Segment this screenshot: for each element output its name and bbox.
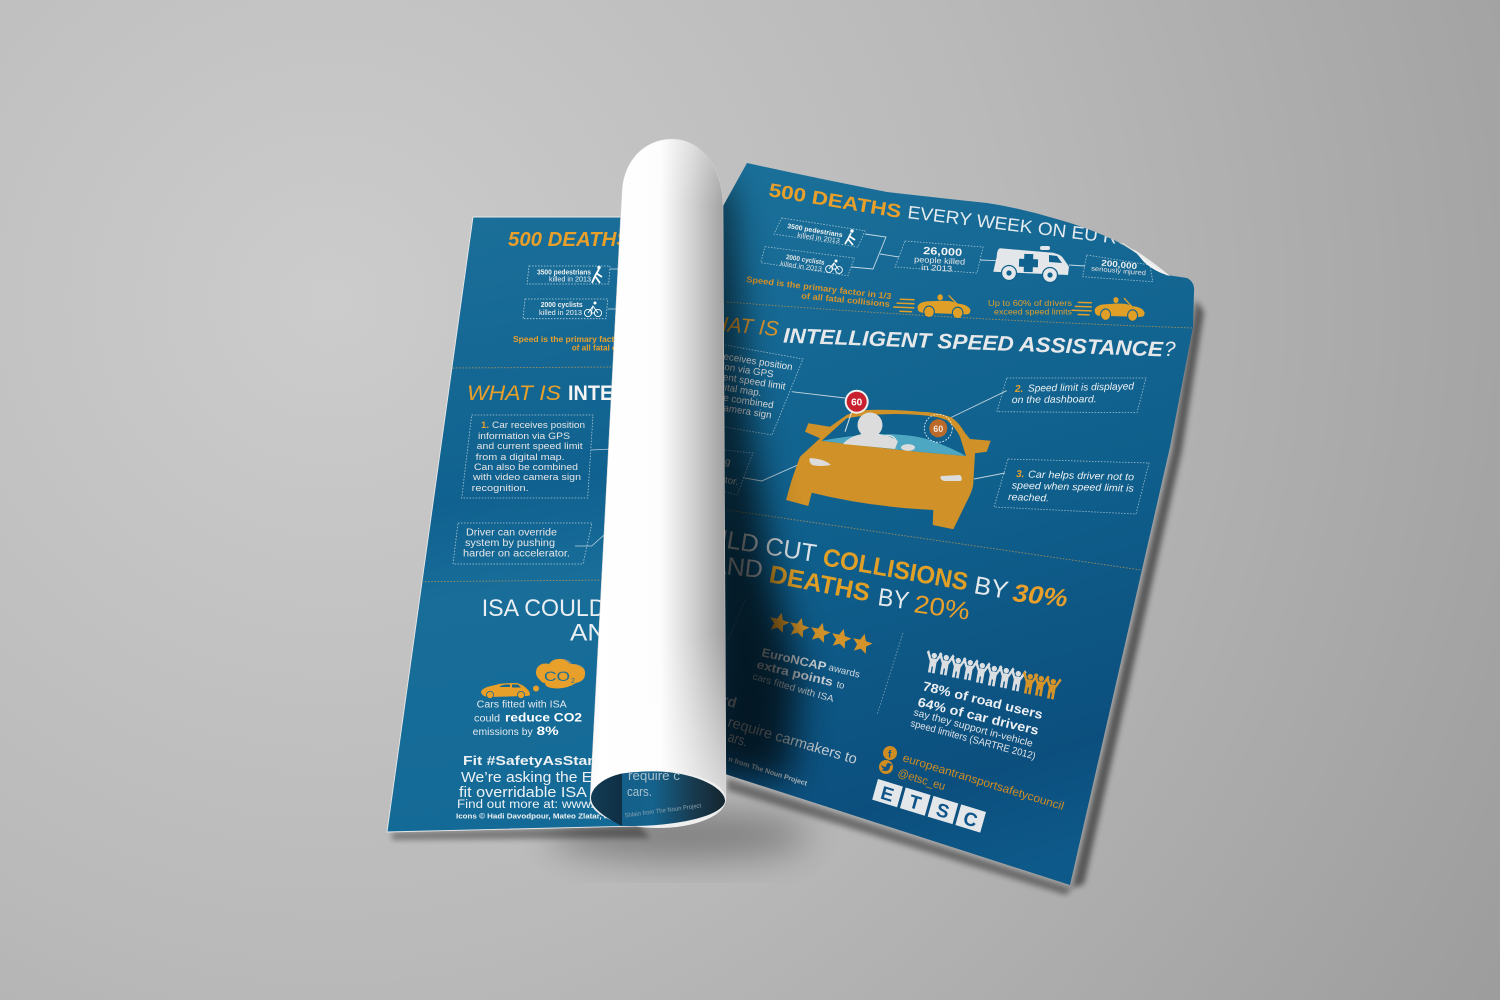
panel: left page of leaflet <box>386 216 638 832</box>
text: speed factor: Speed is the primary factor in 1/3 <box>746 274 892 301</box>
box: step 1: from a digital map. <box>476 452 565 463</box>
box: cyclists: killed in 2013 <box>780 261 823 273</box>
icon: dashboard speed display <box>924 414 952 442</box>
heading: ISA could cut collisions: 20% <box>912 590 972 626</box>
heading: what is intelligent speed assistance <box>724 317 1176 356</box>
text: call to action: Fit #SafetyAsStandard <box>463 753 631 768</box>
box: step 3: 3. <box>1016 469 1025 480</box>
box: step 1: with video camera sign <box>671 395 772 421</box>
box: cyclists: 2000 cyclists <box>785 254 825 267</box>
heading: what is intelligent <box>469 386 612 400</box>
box: 200,000 injured: seriously injured <box>1091 266 1146 277</box>
icon: car and CO2 cloud <box>481 659 585 699</box>
text: drivers exceed limits <box>988 300 1072 316</box>
box: step 1: 1. Car receives position <box>690 346 793 373</box>
box: step 3 <box>994 459 1149 514</box>
heading: ISA could cut: ISA COULD CUT <box>482 595 660 622</box>
text: call to action: Icons © Hadi Davodpour, Mateo Zlatar, Ivan Shlain <box>456 812 646 820</box>
text: reduce CO2: 8% <box>537 726 559 738</box>
icon: facebook: f <box>888 750 892 760</box>
icon: car and CO2 cloud: CO <box>544 668 570 684</box>
box: step 1: information via GPS <box>478 431 570 442</box>
heading: 500 deaths every week <box>769 183 1123 245</box>
roll lighting <box>590 139 726 800</box>
callout lines <box>743 391 1007 481</box>
heading: what is intelligent speed assistance: INTELLIGENT SPEED ASSISTANCE <box>783 325 1164 361</box>
box: pedestrians <box>774 218 865 247</box>
box: step 2 <box>997 378 1146 413</box>
text: speed primary factor <box>513 336 614 350</box>
icon: five stars <box>770 613 872 654</box>
text: speed factor <box>746 276 891 307</box>
box: cyclists <box>761 247 854 276</box>
text: noun project credit: n from The Noun Project <box>727 756 808 788</box>
text: EuroNCAP: to <box>835 679 846 692</box>
text: reduce CO2: emissions by <box>473 727 533 738</box>
shadow cast by roll <box>700 170 800 780</box>
box: pedestrians: 3500 pedestrians <box>537 270 591 276</box>
heading: what is intelligent speed assistance: ? <box>1164 338 1176 361</box>
box: step 1: Can also be combined <box>474 462 578 473</box>
icon: row of people <box>923 650 1062 700</box>
box: cyclists <box>523 299 620 319</box>
heading: ISA could cut collisions: 30% <box>1011 579 1069 613</box>
text: speed factor: of all fatal collisions <box>801 291 891 309</box>
box: cyclists: 2000 cyclists <box>541 302 583 309</box>
text: social handles: europeantransportsafetycouncil <box>901 752 1065 813</box>
heading: what is intelligent speed assistance: WHAT IS <box>692 311 780 341</box>
heading: ISA could cut collisions: COLLISIONS <box>821 543 970 596</box>
logo: ETSC <box>872 779 986 834</box>
text: require carmakers: Fit #SafetyAsStandard <box>586 653 738 712</box>
text: reduce CO2: Cars fitted with ISA <box>477 700 567 711</box>
box: step 1 <box>724 344 804 436</box>
text: reduce CO2 <box>473 700 582 738</box>
icon: roadside speed sign <box>845 390 869 432</box>
text: EuroNCAP <box>753 648 860 702</box>
box: pedestrians: killed in 2013 <box>549 277 591 284</box>
text: speed primary factor: of all fatal collisions <box>572 342 650 352</box>
box: step 1: information via GPS <box>686 356 775 381</box>
box: driver override: harder on accelerator. <box>463 549 570 560</box>
text: EuroNCAP: cars fitted with ISA <box>751 671 836 705</box>
box: step 2: on the dashboard. <box>1012 394 1097 406</box>
icon: speeding car 2 <box>1071 296 1145 322</box>
roll body <box>590 139 726 800</box>
heading: 500 deaths every week: 500 DEATHS <box>767 180 903 223</box>
box: step 1: 1. <box>481 420 489 431</box>
text: survey results: 64% of car drivers <box>916 694 1040 738</box>
box: step 2: 2. <box>1014 384 1023 395</box>
right page content <box>723 175 1192 833</box>
connector lines <box>851 234 1085 269</box>
box: step 3: Car helps driver not to <box>1028 470 1135 483</box>
text: social handles: @etsc_eu <box>896 767 946 793</box>
box: driver override <box>453 523 604 564</box>
icon: twitter <box>879 760 893 774</box>
box: pedestrians <box>527 266 622 284</box>
text: call to action: fit overridable ISA <box>459 785 587 801</box>
box: step 1: Can also be combined <box>676 385 774 411</box>
logo: ETSC: T <box>906 791 924 815</box>
text: EuroNCAP: extra points <box>755 657 835 689</box>
heading: what is intelligent: WHAT IS <box>467 382 561 405</box>
heading: ISA could cut collisions: AND <box>709 551 764 584</box>
text inside roll: Shlain from The Noun Project <box>624 802 702 819</box>
heading: 500 deaths: 500 DEATHS <box>508 229 631 251</box>
roll opening: inside right <box>622 771 725 826</box>
text: require carmakers: require carmakers to <box>726 714 859 768</box>
box: 200,000 injured <box>1083 255 1153 282</box>
left page content <box>422 232 620 820</box>
panel: right page of leaflet <box>723 163 1194 885</box>
box: step 1: recognition. <box>472 483 529 494</box>
heading: ISA could cut collisions: BY <box>876 583 911 615</box>
box: step 2: Speed limit is displayed <box>1028 381 1134 395</box>
icon: ambulance <box>993 246 1069 282</box>
heading: 500 deaths every week: EVERY WEEK ON EU ROADS <box>907 202 1172 254</box>
page curl at top right corner <box>1133 249 1170 276</box>
logo: ETSC: E <box>878 783 896 807</box>
box: driver override: system by pushing <box>649 444 731 468</box>
box: step 1 <box>462 415 612 498</box>
box: cyclists: killed in 2013 <box>539 310 582 317</box>
text: EuroNCAP: EuroNCAP <box>760 645 828 674</box>
box: step 3: reached. <box>1008 492 1049 504</box>
rolled page <box>590 139 726 828</box>
logo: ETSC: S <box>934 800 951 824</box>
text: reduce CO2: reduce CO2 <box>505 713 582 725</box>
box: 26,000 killed: 26,000 <box>923 245 963 259</box>
text: require carmakers: ars. <box>726 729 750 751</box>
text: EuroNCAP: awards <box>827 662 861 681</box>
text: reduce CO2: could <box>474 714 500 725</box>
icon: roadside speed sign: 60 <box>851 398 863 408</box>
text: survey results <box>909 678 1044 762</box>
roll bottom rim <box>590 771 726 828</box>
heading: ISA could cut: AND <box>570 620 625 647</box>
roll opening: inside left fold <box>591 774 622 826</box>
box: 200,000 injured: 200,000 <box>1101 258 1138 271</box>
logo: ETSC: C <box>961 808 980 832</box>
text: call to action: Find out more at: www.etsc.eu <box>457 799 637 811</box>
text inside roll <box>624 769 702 819</box>
icon: large car front view <box>786 410 991 529</box>
box: driver override: system by pushing <box>465 538 555 549</box>
text inside roll: require c <box>628 769 680 783</box>
text: drivers exceed limits: Up to 60% of drivers <box>988 298 1072 308</box>
heading: ISA could cut collisions: DEATHS <box>767 560 872 607</box>
icon: dashboard speed display: 60 <box>933 424 943 434</box>
box: step 1: with video camera sign <box>472 472 581 483</box>
box: step 3: speed when speed limit is <box>1012 481 1134 495</box>
heading: ISA could cut collisions: ISA COULD CUT <box>625 510 818 568</box>
heading: ISA could cut <box>484 599 600 640</box>
text: call to action: We’re asking the EU to <box>461 770 621 786</box>
box: step 1: and current speed limit <box>687 366 787 393</box>
box: step 1: and current speed limit <box>477 441 583 452</box>
text inside roll: cars. <box>627 785 652 799</box>
box: driver override: harder on accelerator. <box>643 462 739 488</box>
icon: car and CO2 cloud: 2 <box>571 678 575 685</box>
box: 26,000 killed <box>895 241 983 274</box>
box: step 1: Car receives position <box>492 420 585 431</box>
text: survey results: say they support in-vehicle <box>912 707 1034 750</box>
box: pedestrians: killed in 2013 <box>797 232 841 245</box>
box: pedestrians: 3500 pedestrians <box>787 223 843 239</box>
ground shadows <box>392 300 1204 895</box>
text: survey results: speed limiters (SARTRE 2012) <box>909 718 1037 762</box>
box: 26,000 killed: in 2013 <box>921 263 953 274</box>
box: 26,000 killed: people killed <box>914 255 966 267</box>
text: require carmakers <box>586 653 859 768</box>
icon: facebook <box>883 746 897 760</box>
heading: what is intelligent: INTELLIGENT <box>568 382 698 405</box>
icon: speeding car 1 <box>893 293 971 319</box>
heading: ISA could cut collisions <box>724 530 1067 620</box>
heading: ISA could cut collisions: BY <box>972 571 1011 605</box>
box: step 1: from a digital map. <box>681 376 762 399</box>
text: survey results: 78% of road users <box>921 678 1044 722</box>
text: call to action <box>456 756 606 820</box>
text: speed primary factor: Speed is the primary factor in 1/3 <box>513 334 647 344</box>
text: drivers exceed limits: exceed speed limits <box>994 306 1072 316</box>
box: driver override <box>724 450 754 496</box>
box: driver override: Driver can override <box>466 528 558 539</box>
